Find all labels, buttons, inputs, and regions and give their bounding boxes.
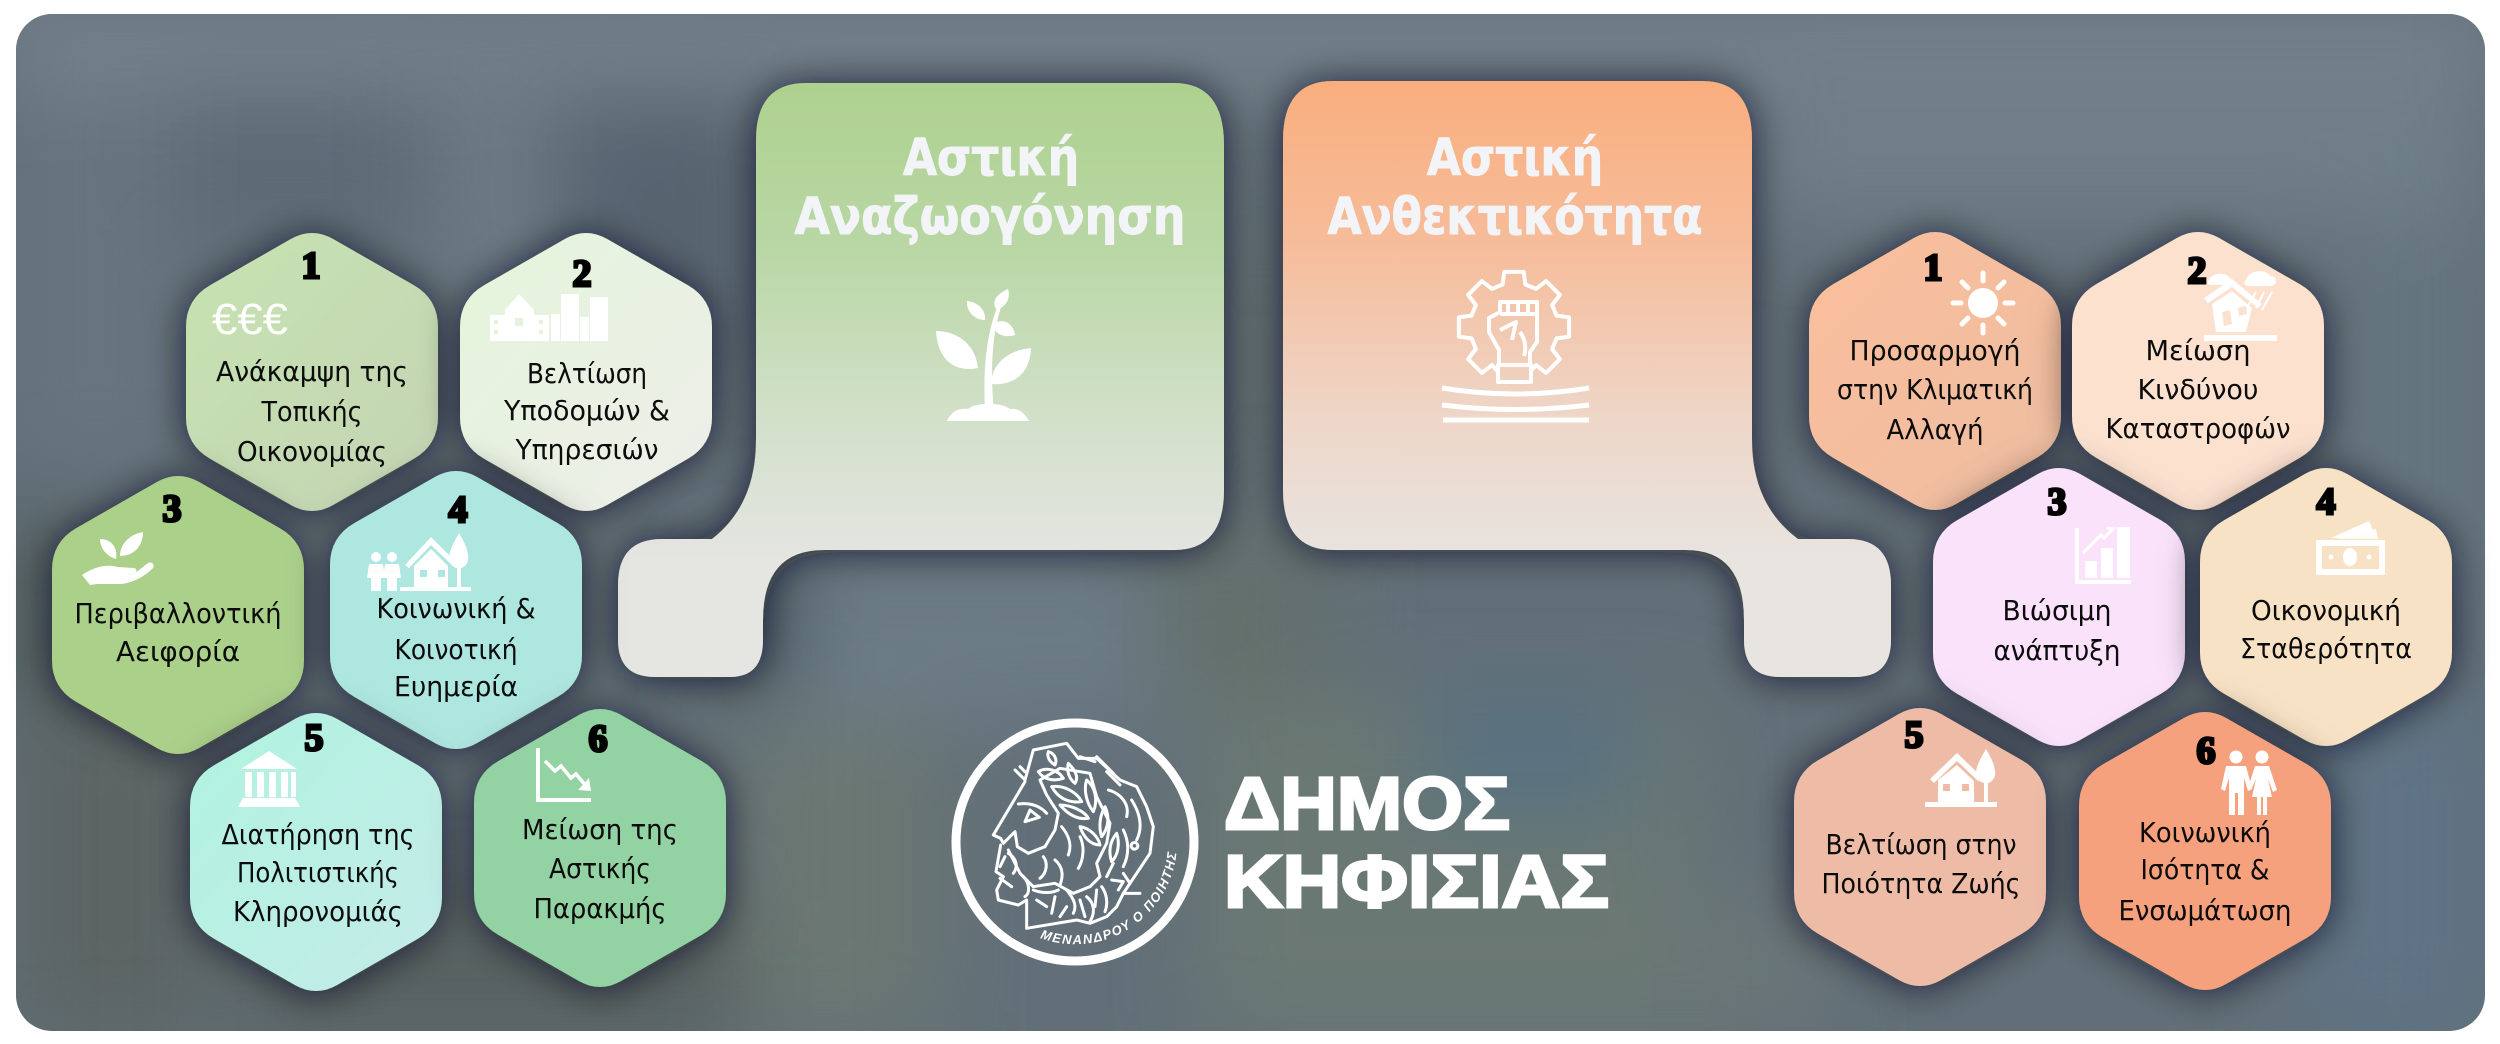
label: [2118, 816, 2292, 927]
seal inscription: ΜΕΝΑΝΔΡΟΥ Ο ΠΟΙΗΤΗΣ: [1040, 851, 1176, 944]
icon: sun: [1953, 273, 2013, 333]
label: Παρακμής: [534, 892, 666, 925]
label: Κοινωνική &: [376, 592, 536, 625]
label: Πολιτιστικής: [237, 856, 399, 889]
heading: Urban Regeneration: Αστική: [903, 129, 1079, 188]
number 6: 6: [2196, 730, 2216, 772]
icon: family, house and tree: [367, 533, 471, 591]
label: Βελτίωση: [527, 357, 647, 390]
icon: house in storm: [2204, 271, 2277, 341]
label: Ισότητα &: [2140, 853, 2270, 886]
hexagon left 6: reducing urban decay: [474, 709, 726, 987]
hexagon left 1: local economic recovery: [186, 233, 438, 511]
label: Προσαρμογή: [1850, 334, 2020, 367]
logo: Municipality of Kifissia: [952, 718, 1609, 966]
label: Κινδύνου: [2138, 373, 2258, 406]
label: Υποδομών &: [503, 394, 670, 427]
label: Κληρονομιάς: [233, 895, 403, 928]
label: [222, 818, 414, 928]
heading: Urban Resilience: Ανθεκτικότητα: [1328, 188, 1702, 247]
number 5: 5: [1904, 714, 1924, 756]
label: Διατήρηση της: [222, 818, 414, 851]
label: Μείωση: [2146, 334, 2250, 367]
shape: [52, 476, 304, 754]
number 2: 2: [2188, 250, 2206, 292]
label: Σταθερότητα: [2240, 632, 2412, 665]
number 1: 1: [302, 245, 320, 287]
hexagon left 4: social and community wellbeing: [330, 471, 582, 749]
icon: falling chart: [538, 748, 591, 800]
number 6: 6: [588, 718, 608, 760]
label: Κοινοτική: [394, 633, 518, 666]
heading: Urban Regeneration: Αναζωογόνηση: [794, 188, 1186, 247]
shape: [1933, 468, 2185, 746]
shape: [190, 713, 442, 991]
label: [216, 355, 408, 468]
label: [503, 357, 670, 466]
shape: [2072, 232, 2324, 510]
label: Κοινωνική: [2139, 816, 2271, 849]
label: [2240, 594, 2412, 665]
label: ανάπτυξη: [1994, 634, 2120, 667]
label: Ευημερία: [394, 670, 518, 703]
label: Περιβαλλοντική: [74, 597, 282, 630]
shape: [474, 709, 726, 987]
label: [1837, 334, 2033, 446]
shape: [460, 233, 712, 511]
label: Βιώσιμη: [2002, 594, 2112, 627]
wordmark: [1224, 762, 1609, 923]
heading: Urban Resilience: Αστική: [1427, 129, 1603, 188]
label: [2106, 334, 2290, 445]
hexagon right 2: disaster risk reduction: [2072, 232, 2324, 510]
label: Οικονομική: [2251, 594, 2401, 627]
label: Αστικής: [549, 852, 651, 885]
icon: gear with fist: [1442, 272, 1589, 420]
shape: [2200, 468, 2452, 746]
label: Ενσωμάτωση: [2118, 894, 2292, 927]
heading: Urban Regeneration: [794, 129, 1186, 247]
icon: banknotes: [2316, 521, 2385, 575]
hexagon left 2: infrastructure and services: [460, 233, 712, 511]
icon: hand holding plant: [82, 532, 154, 585]
number 3: 3: [2048, 481, 2066, 523]
hexagon right 4: economic stability: [2200, 468, 2452, 746]
label: Βελτίωση στην: [1826, 828, 2016, 861]
panel: Urban Regeneration: [618, 83, 1224, 677]
icon: seedling: [936, 289, 1031, 421]
hexagon right 6: social equality and inclusion: [2079, 712, 2331, 990]
hexagon left 5: cultural heritage: [190, 713, 442, 991]
label: Τοπικής: [261, 395, 362, 428]
label: Αλλαγή: [1886, 413, 1984, 446]
wordmark: ΔΗΜΟΣ: [1224, 762, 1510, 845]
label: Καταστροφών: [2106, 412, 2290, 445]
panel shape: green tab: [618, 83, 1224, 677]
seal ring: [956, 723, 1194, 961]
label: Αειφορία: [116, 635, 240, 668]
number 4: 4: [448, 489, 468, 531]
label: [522, 813, 678, 925]
label: [1822, 828, 2020, 900]
hexagon right 1: climate adaptation: [1809, 232, 2061, 510]
seal: Menander head line drawing: [993, 743, 1153, 928]
shape: [2079, 712, 2331, 990]
icon: buildings: [490, 294, 608, 341]
label: [74, 597, 282, 668]
hexagon left 3: environmental sustainability: [52, 476, 304, 754]
number 3: 3: [162, 488, 182, 530]
number 4: 4: [2316, 481, 2336, 523]
label: [1994, 594, 2120, 667]
shape: [186, 233, 438, 511]
number 1: 1: [1924, 247, 1942, 289]
icon: euro signs: €€€: [212, 295, 288, 344]
panel shape: orange tab: [1283, 81, 1891, 677]
icon: couple: [2221, 750, 2277, 815]
shape: [330, 471, 582, 749]
panel: Urban Resilience: [1283, 81, 1891, 677]
wordmark: ΚΗΦΙΣΙΑΣ: [1224, 840, 1609, 923]
label: Μείωση της: [522, 813, 678, 846]
label: Υπηρεσιών: [515, 433, 658, 466]
shape: [1809, 232, 2061, 510]
label: Ποιότητα Ζωής: [1822, 867, 2020, 900]
number 5: 5: [304, 717, 324, 759]
label: [376, 592, 536, 703]
hexagon right 5: quality of life: [1794, 708, 2046, 986]
icon: house and tree: [1925, 749, 1997, 807]
shape: [1794, 708, 2046, 986]
label: Οικονομίας: [237, 435, 387, 468]
label: στην Κλιματική: [1837, 373, 2033, 406]
icon: growth chart: [2075, 527, 2131, 584]
label: Ανάκαμψη της: [216, 355, 408, 388]
hexagon right 3: sustainable development: [1933, 468, 2185, 746]
heading: Urban Resilience: [1328, 129, 1702, 247]
number 2: 2: [572, 253, 592, 295]
icon: classical temple: [238, 751, 300, 807]
